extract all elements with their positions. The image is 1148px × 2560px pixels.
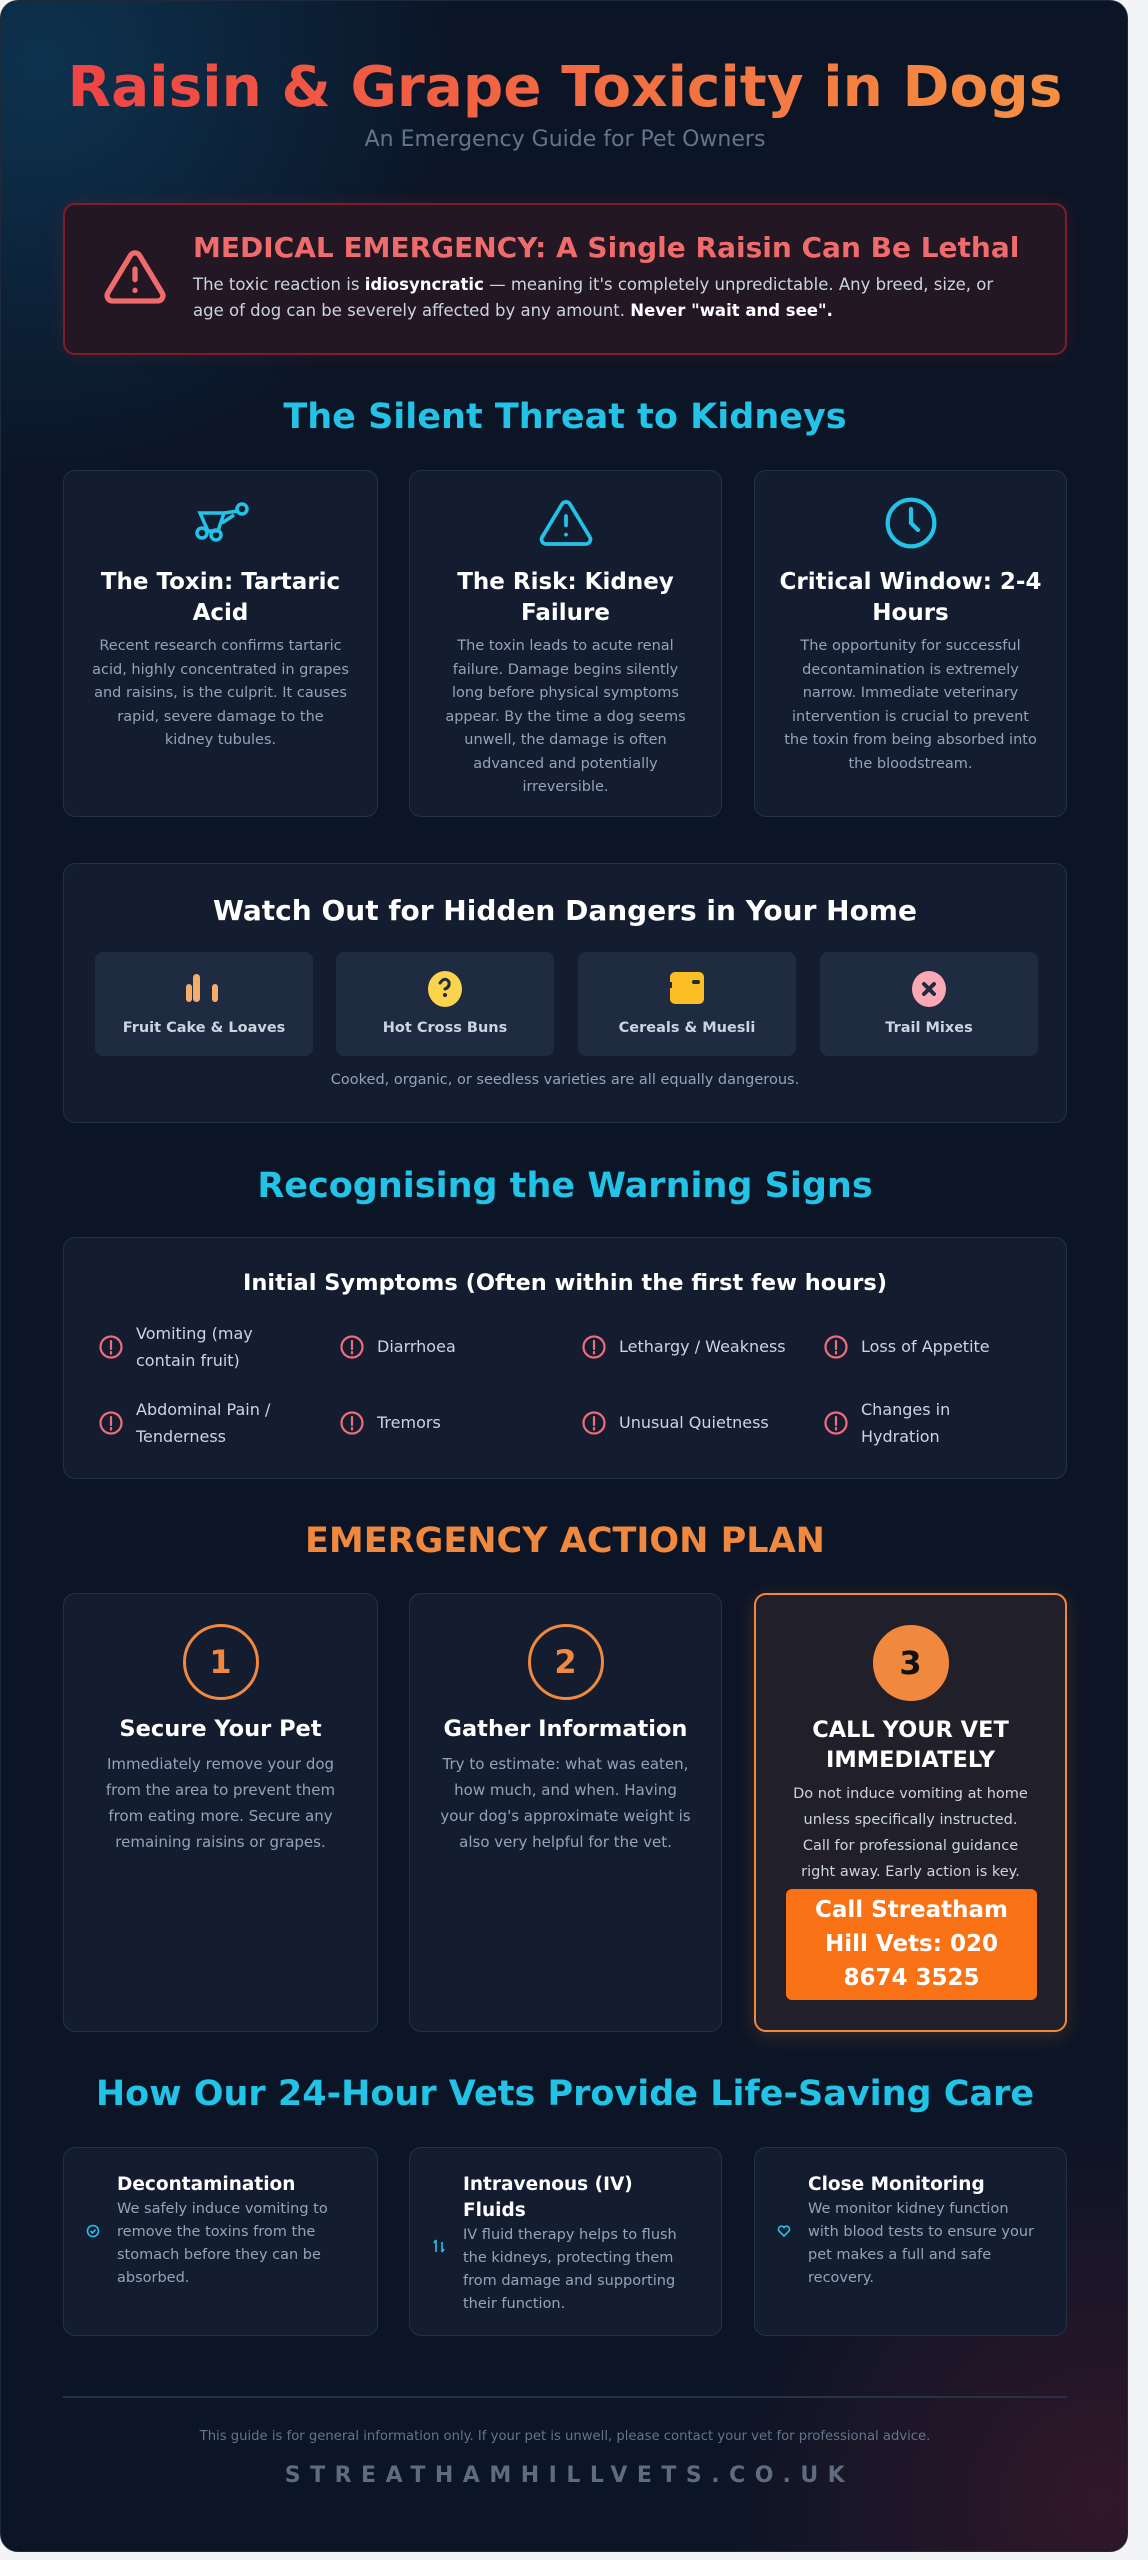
title: Raisin & Grape Toxicity in Dogs	[68, 55, 1062, 120]
care text: Close Monitoring	[808, 2174, 985, 2195]
number badge	[182, 1624, 258, 1700]
step text: Try to estimate: what was eaten, how much, and when. Having your dog's approximate weight is also very helpful for the vet.	[440, 1755, 691, 1851]
care text: Decontamination	[117, 2174, 295, 2195]
card title: The Toxin: Tartaric	[101, 569, 340, 595]
card text: Recent research confirms tartaric acid, highly concentrated in grapes and raisins, is the culprit. It causes rapid, severe damage to the kidney tubules.	[92, 638, 349, 748]
item: hot cross buns	[336, 952, 554, 1056]
number badge: 3	[899, 1644, 922, 1682]
card: window	[754, 470, 1067, 817]
number badge: 2	[554, 1643, 577, 1681]
step 1	[63, 1593, 378, 2032]
item: cereals: Cereals & Muesli	[619, 1020, 755, 1036]
symptom list: Diarrhoea	[377, 1337, 456, 1356]
number badge	[872, 1625, 948, 1701]
card text: The toxin leads to acute renal failure. Damage begins silently long before physical symptoms appear. By the time a dog seems unwell, the damage is often advanced and potentially irreversible.	[445, 638, 686, 795]
card title: The Risk: Kidney	[457, 569, 674, 595]
card title	[457, 569, 674, 626]
symptom list: Loss of Appetite	[861, 1337, 990, 1356]
step title: Gather Information	[444, 1716, 687, 1742]
care text: Intravenous (IV) Fluids	[463, 2174, 633, 2221]
number badge	[528, 1624, 604, 1700]
icon: flow	[433, 2240, 445, 2252]
panel title: Initial Symptoms (Often within the first few hours)	[243, 1270, 887, 1296]
number badge: 1	[209, 1643, 232, 1681]
heading: how we care: How Our 24-Hour Vets Provide Life-Saving Care	[96, 2074, 1034, 2114]
care text: We safely induce vomiting to remove the toxins from the stomach before they can be absorbed.	[117, 2201, 328, 2286]
item: cereals	[578, 952, 796, 1056]
call button: 8674 3525	[843, 1965, 980, 1991]
care text: IV fluid therapy helps to flush the kidneys, protecting them from damage and supporting their function.	[463, 2227, 677, 2312]
care text	[463, 2174, 677, 2312]
symptom list: Lethargy / Weakness	[619, 1337, 786, 1356]
item: fruit cake: Fruit Cake & Loaves	[123, 1020, 285, 1036]
card title: Critical Window: 2-4	[780, 569, 1041, 595]
alert text: The toxic reaction is idiosyncratic — meaning it's completely unpredictable. Any breed, size, or age of dog can be severely affected by any amount. Never "wait and see".	[193, 275, 993, 320]
step 3	[754, 1593, 1067, 2032]
panel: hidden dangers	[63, 863, 1067, 1123]
heading: warning signs: Recognising the Warning Signs	[257, 1166, 873, 1206]
card title	[780, 569, 1041, 626]
call button: Call Streatham	[815, 1897, 1008, 1923]
call button	[786, 1889, 1037, 2000]
step title	[812, 1717, 1009, 1773]
item: fruit cake	[95, 952, 313, 1056]
symptom list	[99, 1324, 990, 1446]
heading: action plan: EMERGENCY ACTION PLAN	[305, 1521, 825, 1561]
step title: IMMEDIATELY	[826, 1747, 995, 1773]
footnote: Cooked, organic, or seedless varieties are all equally dangerous.	[331, 1072, 799, 1088]
icon: clock	[886, 498, 936, 548]
panel: symptoms	[63, 1237, 1067, 1479]
symptom list: Abdominal Pain / Tenderness	[136, 1400, 270, 1446]
subtitle: An Emergency Guide for Pet Owners	[365, 127, 765, 152]
icon: heart	[778, 2225, 790, 2237]
card: risk	[409, 470, 722, 817]
card: toxin	[63, 470, 378, 817]
alert panel	[63, 203, 1067, 355]
panel title: Watch Out for Hidden Dangers in Your Home	[213, 894, 917, 927]
card title	[100, 569, 340, 626]
card title: Acid	[193, 600, 248, 626]
item: trail mixes: Trail Mixes	[885, 1020, 973, 1036]
step title: CALL YOUR VET	[812, 1717, 1009, 1743]
step text: Immediately remove your dog from the area to prevent them from eating more. Secure any remaining raisins or grapes.	[106, 1755, 335, 1851]
symptom list: Changes in Hydration	[861, 1400, 950, 1446]
care text: We monitor kidney function with blood tests to ensure your pet makes a full and safe recovery.	[808, 2201, 1034, 2286]
step 2	[409, 1593, 722, 2032]
step text: Do not induce vomiting at home unless specifically instructed. Call for professional guidance right away. Early action is key.	[793, 1786, 1028, 1880]
call button: Hill Vets: 020	[825, 1931, 998, 1957]
icon: warning	[104, 250, 166, 304]
symptom list: Vomiting (may contain fruit)	[136, 1324, 253, 1370]
card text: The opportunity for successful decontamination is extremely narrow. Immediate veterinary intervention is crucial to prevent the toxin from being absorbed into the bloodstream.	[784, 638, 1037, 772]
symptom list: Tremors	[377, 1413, 441, 1432]
item: trail mixes	[820, 952, 1038, 1056]
care: IV fluids	[409, 2147, 722, 2336]
card title: Failure	[521, 600, 610, 626]
symptom list: Unusual Quietness	[619, 1413, 769, 1432]
footer url: STREATHAMHILLVETS.CO.UK	[285, 2463, 854, 2488]
alert heading: MEDICAL EMERGENCY: A Single Raisin Can Be Lethal	[193, 231, 1019, 264]
icon: warning	[540, 500, 592, 546]
item: hot cross buns: Hot Cross Buns	[383, 1020, 507, 1036]
card title: Hours	[872, 600, 949, 626]
care: decontamination	[63, 2147, 378, 2336]
care: monitoring	[754, 2147, 1067, 2336]
step title: Secure Your Pet	[119, 1716, 322, 1742]
icon: check	[86, 2224, 100, 2238]
heading: silent threat: The Silent Threat to Kidneys	[283, 397, 847, 437]
footer disclaimer: This guide is for general information only. If your pet is unwell, please contact your vet for professional advice.	[200, 2429, 930, 2444]
icon: molecule	[195, 502, 249, 542]
